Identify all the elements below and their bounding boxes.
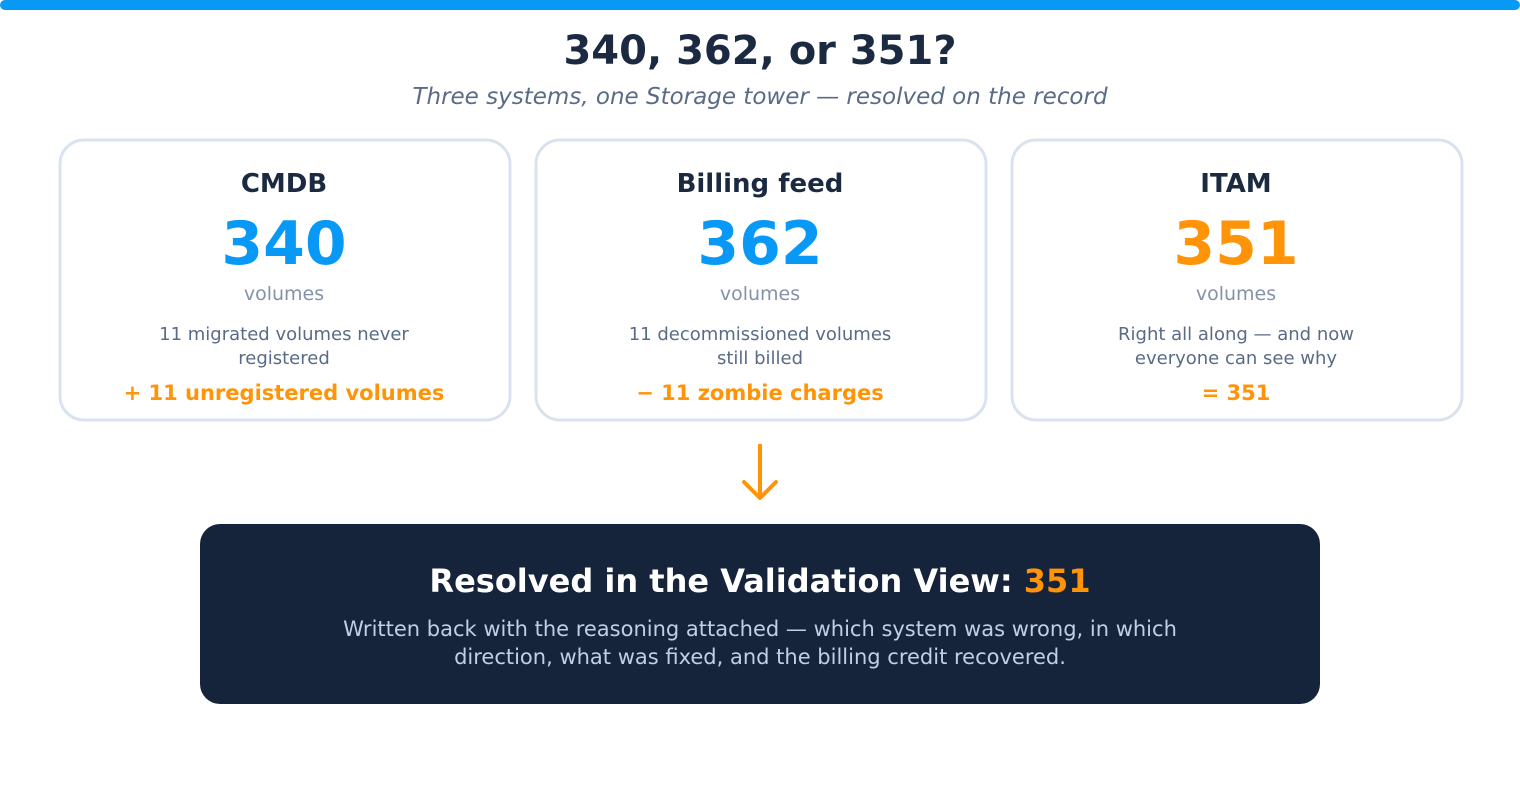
explanation: everyone can see why: [1135, 348, 1337, 369]
panel: CMDB: [60, 140, 510, 420]
panel: ITAM: [1012, 140, 1462, 420]
unit label: volumes: [244, 283, 324, 305]
panel: resolution: [200, 524, 1320, 704]
system name: Billing feed: [677, 169, 843, 199]
unit label: volumes: [720, 283, 800, 305]
resolution description: Written back with the reasoning attached — which system was wrong, in which: [343, 617, 1177, 641]
adjustment: + 11 unregistered volumes: [124, 381, 444, 405]
adjustment: − 11 zombie charges: [636, 381, 884, 405]
explanation: still billed: [717, 348, 803, 369]
card outline: [536, 140, 986, 420]
title: 340, 362, or 351?: [563, 28, 957, 74]
subtitle: Three systems, one Storage tower — resolved on the record: [412, 84, 1108, 110]
volume count: 340: [221, 209, 347, 279]
top accent bar: [0, 0, 1520, 10]
volume count: 362: [697, 209, 823, 279]
volume count: 351: [1173, 209, 1299, 279]
panel background: [200, 524, 1320, 704]
card outline: [1012, 140, 1462, 420]
system name: ITAM: [1200, 169, 1272, 199]
adjustment: = 351: [1202, 381, 1270, 405]
card outline: [60, 140, 510, 420]
explanation: Right all along — and now: [1118, 324, 1354, 345]
explanation: 11 decommissioned volumes: [629, 324, 891, 345]
system name: CMDB: [241, 169, 327, 199]
arrow: down to resolution: [744, 444, 776, 498]
explanation: 11 migrated volumes never: [159, 324, 409, 345]
resolution description: direction, what was fixed, and the billing credit recovered.: [454, 645, 1066, 669]
unit label: volumes: [1196, 283, 1276, 305]
explanation: registered: [238, 348, 330, 369]
panel: Billing feed: [536, 140, 986, 420]
resolution heading: Resolved in the Validation View: 351: [429, 562, 1091, 600]
